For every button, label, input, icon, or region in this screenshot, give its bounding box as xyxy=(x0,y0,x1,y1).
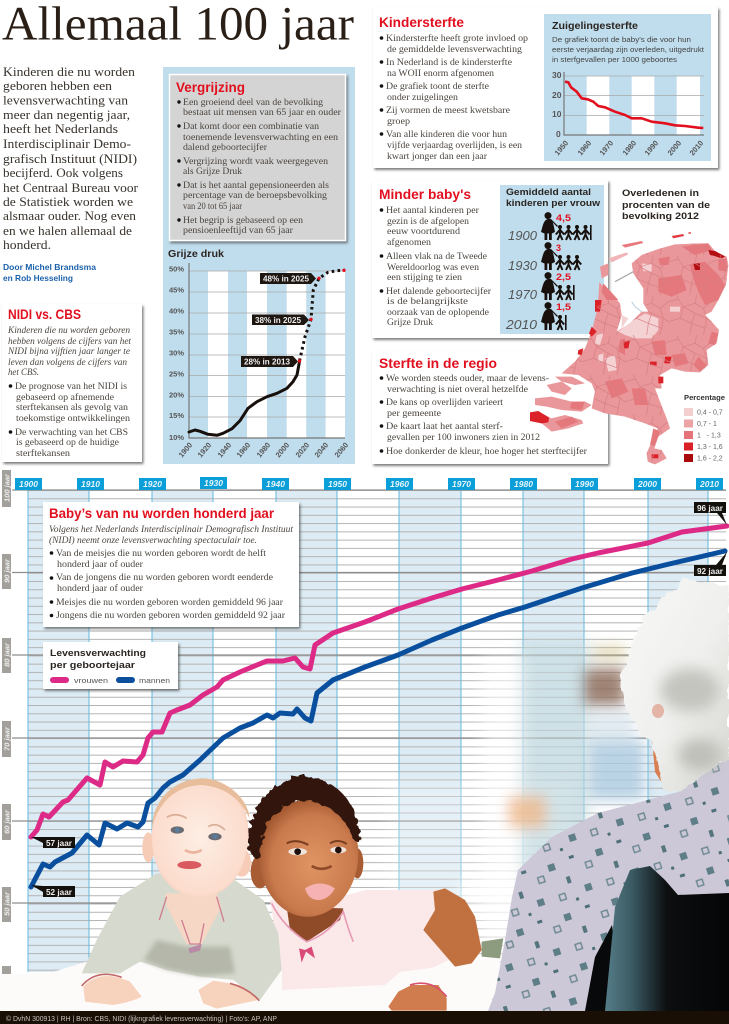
chart: Grijze druk: 30% xyxy=(169,348,184,358)
chart: Grijze druk: 35% xyxy=(169,328,184,336)
chart: Zuigelingesterfte: 1990 xyxy=(643,139,660,157)
bullets: babies: Van de meisjes die nu worden geboren wordt de helft xyxy=(56,548,266,558)
bullets: Vergrijzing: toenemende levensverwachting en een xyxy=(183,132,338,142)
year labels: 1990 xyxy=(575,479,594,489)
text: chart description: eerste verjaardag zijn overleden, uitgedrukt xyxy=(552,45,705,54)
chart: Grijze druk: 50% xyxy=(169,264,184,274)
age labels: 50 jaar xyxy=(2,891,12,916)
bullets: Kindersterfte: De grafiek toont de sterfte xyxy=(386,81,489,91)
chart: Zuigelingesterfte: 2010 xyxy=(688,139,705,157)
legend: Percentage: 1,3 - 1,6 xyxy=(697,444,723,451)
year labels: 1930 xyxy=(204,478,223,488)
bullets: NIDI: toekomstige ontwikkelingen xyxy=(16,413,130,423)
bullets: babies: honderd jaar of ouder xyxy=(57,559,143,569)
panel: Kindersterfte xyxy=(373,7,718,168)
chart: Zuigelingesterfte: 30 xyxy=(552,70,562,80)
bullets: Minder baby's: is de belangrijkste xyxy=(387,296,468,306)
callout: 57 jaar: 57 jaar xyxy=(46,839,72,848)
intro text: Kinderen die nu worden xyxy=(3,64,136,79)
byline: en Rob Hesseling xyxy=(3,273,73,283)
bullets: Kindersterfte: onder zuigelingen xyxy=(387,92,458,102)
blue line: mannen xyxy=(31,551,725,887)
intro text: becijferd. Ook volgens xyxy=(3,165,123,180)
bullets: babies: Van de jongens die nu worden geboren wordt eenderde xyxy=(56,572,273,582)
legend: Percentage: 0,4 - 0,7 xyxy=(697,410,723,416)
intro text: meer dan negentig jaar, xyxy=(3,107,130,122)
panel: Vergrijzing and Grijze druk xyxy=(163,67,355,464)
year labels: 1940 xyxy=(266,479,285,489)
bullets: Sterfte in de regio: verwachting is niet overal hetzelfde xyxy=(387,384,528,394)
pictogram row: 2010, 1,5 children: 1,5 xyxy=(556,302,571,312)
decade columns xyxy=(28,490,708,972)
legend: Levensverwachting: per geboortejaar xyxy=(50,660,135,671)
intro text: grafisch Instituut (NIDI) xyxy=(3,151,137,166)
heading: Kindersterfte: Kindersterfte xyxy=(379,14,464,30)
bullets: Kindersterfte: kwart jonger dan een jaar xyxy=(387,151,487,161)
panel: NIDI vs. CBS xyxy=(2,304,142,462)
bullets: Vergrijzing: bestaat uit mensen van 65 jaar en ouder xyxy=(183,107,341,117)
chart: Zuigelingesterfte: 0 xyxy=(556,129,561,139)
chart: Grijze druk: 40% xyxy=(169,306,184,316)
chart: Grijze druk: 1960 xyxy=(235,441,252,459)
wheelchair xyxy=(585,866,729,1011)
callout: 52 jaar: 52 jaar xyxy=(46,888,72,897)
line: grijze druk history xyxy=(189,362,300,435)
chart: Zuigelingesterfte: 1950 xyxy=(553,139,570,157)
callout: 48% in 2025: 48% in 2025 xyxy=(263,274,310,284)
bullets: Vergrijzing: pensioenleeftijd van 65 jaar xyxy=(183,225,293,235)
intro text: alsmaar ouder. Nog even xyxy=(3,208,137,223)
legend: Levensverwachting xyxy=(43,642,178,689)
photo: blanket xyxy=(0,955,500,1012)
callout: 92 jaar: 92 jaar xyxy=(697,567,723,576)
text: panel intro: (NIDI) neemt onze levensverwachting spectaculair toe. xyxy=(49,535,257,545)
chart: Zuigelingesterfte: 1980 xyxy=(621,139,638,157)
bullets: Sterfte in de regio: We worden steeds ouder, maar de levens- xyxy=(386,373,549,383)
yearly grid xyxy=(28,490,726,972)
bullets: Minder baby's: gezin is de afgelopen xyxy=(387,216,469,226)
pictogram row: 2010, 1,5 children: 2010 xyxy=(505,317,538,332)
bullets: Sterfte in de regio: gevallen per 100 inwoners zien in 2012 xyxy=(387,432,540,442)
callout: 28% in 2013: 28% in 2013 xyxy=(244,358,291,366)
legend: Levensverwachting: vrouwen xyxy=(74,676,108,685)
bullets: Sterfte in de regio: Hoe donkerder de kleur, hoe hoger het sterftecijfer xyxy=(386,446,587,456)
bullets: NIDI: sterftekansen xyxy=(16,448,70,458)
intro text: levensverwachting van xyxy=(3,92,129,108)
text: NIDI intro xyxy=(7,325,131,377)
bullets: Vergrijzing: van 20 tot 65 jaar xyxy=(183,201,242,211)
callout: 57 jaar xyxy=(31,837,75,848)
pictogram row: 1900, 4,5 children: 4,5 xyxy=(556,213,571,223)
year labels: 1980 xyxy=(514,479,533,489)
chart: Grijze druk: 1980 xyxy=(255,441,272,459)
footer xyxy=(0,1011,729,1024)
bullets: babies: Jongens die nu worden geboren worden gemiddeld 92 jaar xyxy=(56,610,285,620)
chart: Zuigelingesterfte: 1970 xyxy=(598,139,615,157)
bullets: Sterfte in de regio xyxy=(380,373,587,456)
heading: kinderen per vrouw: Gemiddeld aantal xyxy=(506,187,591,198)
bullets: Vergrijzing: als Grijze Druk xyxy=(183,166,242,176)
pictogram row: 1970, 2,5 children: 1970 xyxy=(508,287,538,302)
age labels: 90 jaar xyxy=(2,558,12,583)
year labels: 1900 xyxy=(19,479,38,489)
callout: 38% in 2025 xyxy=(252,314,309,325)
heading: kinderen per vrouw xyxy=(506,187,601,209)
chart: Grijze druk: 1920 xyxy=(196,441,213,459)
bullets: Vergrijzing: Dat komt door een combinatie van xyxy=(183,121,319,131)
callout: 96 jaar: 96 jaar xyxy=(697,504,723,513)
pictogram row: 1900, 4,5 children: 1900 xyxy=(508,228,538,243)
hair xyxy=(622,580,729,792)
bullets: Sterfte in de regio: De kans op overlijden varieert xyxy=(386,397,503,407)
pictogram row: 1970, 2,5 children: 2,5 xyxy=(556,272,571,282)
year labels: 2010 xyxy=(699,479,719,489)
legend: Percentage: 1,6 - 2,2 xyxy=(697,456,723,462)
legend: Percentage: 0,7 - 1 xyxy=(697,421,717,428)
bullets: Kindersterfte: de gemiddelde levensverwachting xyxy=(387,44,522,54)
bullets: babies xyxy=(50,548,285,620)
pictogram row: 2010, 1,5 children xyxy=(505,302,571,332)
intro text: honderd. xyxy=(3,237,51,252)
map: Netherlands mortality xyxy=(530,232,728,464)
chart: Grijze druk: 1900 xyxy=(177,441,194,459)
panel: Zuigelingesterfte xyxy=(544,14,711,161)
chart: Zuigelingesterfte: 2000 xyxy=(666,139,683,157)
intro text: het Centraal Bureau voor xyxy=(3,180,139,195)
bullets: Minder baby's: Grijze Druk xyxy=(387,317,433,327)
callout: 96 jaar xyxy=(694,502,727,525)
callout: 52 jaar xyxy=(31,885,75,897)
intro text: heeft het Nederlands xyxy=(3,121,118,136)
bullets: Minder baby's: Het dalende geboortecijfer xyxy=(386,286,491,296)
bullets: Vergrijzing xyxy=(177,97,341,235)
bullets: Vergrijzing: Vergrijzing wordt vaak weergegeven xyxy=(183,156,328,166)
data points xyxy=(298,269,346,363)
bullets: NIDI: sterftekansen als gevolg van xyxy=(16,402,128,412)
panel: Minder baby's xyxy=(372,180,608,338)
year labels: 1960 xyxy=(390,479,409,489)
bullets: Minder baby's: Het aantal kinderen per xyxy=(386,205,479,215)
bullets: NIDI: De prognose van het NIDI is xyxy=(15,381,127,391)
year labels: 1920 xyxy=(143,479,162,489)
pictogram row: 1970, 2,5 children xyxy=(508,272,575,302)
panel: Vergrijzing box xyxy=(170,74,346,240)
bullets: Kindersterfte: vijfde verjaardag overlijden, is een xyxy=(387,140,522,150)
chart: life expectancy xyxy=(2,470,726,974)
heading: NIDI vs. CBS: NIDI vs. CBS xyxy=(8,306,81,322)
bullets: Kindersterfte xyxy=(380,33,528,161)
bullets: Vergrijzing: Dat is het aantal gepensioneerden als xyxy=(183,180,329,190)
text: NIDI intro: NIDI bijna vijftien jaar langer te xyxy=(7,346,130,356)
chart: Grijze druk: 2020 xyxy=(294,441,311,459)
chart: Grijze druk: 25% xyxy=(169,370,184,378)
bullets: Vergrijzing: Het begrip is gebaseerd op een xyxy=(183,215,303,225)
line: grijze druk projection xyxy=(300,270,345,361)
age labels: 70 jaar xyxy=(2,726,12,751)
bullets: Kindersterfte: Van alle kinderen die voor hun xyxy=(386,129,507,139)
bullets: NIDI: De verwachting van het CBS xyxy=(15,427,128,437)
bullets: Minder baby's: Alleen vlak na de Tweede xyxy=(386,251,487,261)
year labels: 1970 xyxy=(452,479,471,489)
bullets: NIDI: gebaseerd op afnemende xyxy=(16,392,114,402)
bullets: Minder baby's: oorzaak van de oplopende xyxy=(387,307,489,317)
heading: Minder baby's: Minder baby's xyxy=(379,186,471,202)
year labels xyxy=(15,477,723,490)
intro text: Interdisciplinair Demo- xyxy=(3,136,131,151)
footer: © DvhN 300913 | RH | Bron: CBS, NIDI (lijkngrafiek levensverwachting) | Foto's: AP, ANP xyxy=(6,1015,277,1023)
chart: Grijze druk: 20% xyxy=(169,390,184,400)
callout: 48% in 2025 xyxy=(260,273,316,284)
text: NIDI intro: leven dan volgens de cijfers van xyxy=(8,357,127,367)
gown xyxy=(488,757,729,1011)
bullets: Vergrijzing: Een groeiend deel van de bevolking xyxy=(183,97,323,107)
chart: Zuigelingesterfte: 1960 xyxy=(576,139,593,157)
chart: Grijze druk xyxy=(169,263,350,459)
chart: Grijze druk: 15% xyxy=(169,411,184,420)
line: infant mortality xyxy=(565,82,703,128)
byline xyxy=(3,262,96,283)
text: NIDI intro: het CBS. xyxy=(8,367,39,377)
legend: Percentage: Percentage xyxy=(684,393,725,402)
pictogram row: 1900, 4,5 children xyxy=(508,212,592,243)
text: panel intro xyxy=(49,524,293,545)
chart: Grijze druk: 2040 xyxy=(313,441,330,459)
intro text: geboren hebben een xyxy=(3,78,113,93)
bullets: NIDI: is gebaseerd op de huidige xyxy=(16,437,119,447)
bullets: Minder baby's xyxy=(380,205,491,327)
intro text: en we halen allemaal de xyxy=(3,223,132,238)
heading: Overledenen in procenten: procenten van de xyxy=(622,200,710,211)
heading: Sterfte in de regio: Sterfte in de regio xyxy=(379,355,497,371)
bullets: Minder baby's: een stijging te zien xyxy=(387,272,462,282)
year labels: 1950 xyxy=(328,479,347,489)
heading: Overledenen in procenten xyxy=(622,188,710,222)
text: NIDI intro: hebben volgens de cijfers van het xyxy=(8,336,131,346)
age labels xyxy=(2,470,12,974)
chart: Grijze druk: 1940 xyxy=(216,441,233,459)
bullets: Sterfte in de regio: De kaart laat het aantal sterf- xyxy=(386,421,503,431)
callout: 38% in 2025: 38% in 2025 xyxy=(255,316,302,325)
bullets: Kindersterfte: groep xyxy=(387,116,410,126)
bullets: Kindersterfte: In Nederland is de kindersterfte xyxy=(386,57,512,67)
heading: Zuigelingesterfte: Zuigelingesterfte xyxy=(552,20,638,32)
bullets: babies: honderd jaar of ouder xyxy=(57,583,143,593)
chart: Zuigelingesterfte: 10 xyxy=(552,109,562,119)
chart: Zuigelingesterfte: 20 xyxy=(552,90,562,100)
bullets: Minder baby's: Wereldoorlog was even xyxy=(387,262,479,272)
heading: Overledenen in procenten: Overledenen in xyxy=(622,188,699,199)
text: NIDI intro: Kinderen die nu worden geboren xyxy=(7,325,130,335)
text: panel intro: Volgens het Nederlands Interdisciplinair Demografisch Instituut xyxy=(49,524,293,534)
text: chart description: De grafiek toont de baby's die voor hun xyxy=(552,35,691,44)
intro text xyxy=(3,64,139,252)
chart: Zuigelingesterfte xyxy=(552,70,705,157)
bullets: Sterfte in de regio: per gemeente xyxy=(387,408,441,418)
photo: elderly person xyxy=(488,580,729,1011)
heading: Baby's van nu worden honderd jaar: Baby’s van nu worden honderd jaar xyxy=(49,505,275,521)
bullets: Minder baby's: afgenomen xyxy=(387,237,431,247)
chart: Grijze druk: 45% xyxy=(169,286,184,294)
age labels: 60 jaar xyxy=(2,809,12,834)
chart: Grijze druk: 10% xyxy=(169,433,184,442)
panel: Gemiddeld aantal kinderen per vrouw xyxy=(500,185,604,334)
bullets: Kindersterfte: Kindersterfte heeft grote invloed op xyxy=(386,33,528,43)
bullets: Vergrijzing: percentage van de beroepsbevolking xyxy=(183,190,327,200)
chart: Grijze druk: 2000 xyxy=(274,441,291,459)
legend: Levensverwachting: mannen xyxy=(139,676,170,685)
legend: Percentage xyxy=(684,393,725,462)
intro text: de Statistiek worden we xyxy=(3,194,133,209)
pictogram row: 1930, 3 children: 3 xyxy=(556,243,561,253)
heading: Overledenen in procenten: bevolking 2012 xyxy=(622,211,699,222)
legend: Levensverwachting: Levensverwachting xyxy=(50,648,146,659)
photo: light-skinned baby xyxy=(82,778,282,1009)
heading: Grijze druk: Grijze druk xyxy=(168,248,224,260)
panel: Sterfte in de regio xyxy=(372,351,608,464)
pink line: vrouwen xyxy=(31,526,727,837)
heading: kinderen per vrouw: kinderen per vrouw xyxy=(506,198,601,209)
chart: Grijze druk: 2060 xyxy=(333,441,350,459)
bullets: Vergrijzing: dalend geboortecijfer xyxy=(183,142,267,152)
text: chart description xyxy=(552,35,705,64)
photo: dark-skinned baby xyxy=(248,777,503,1011)
age labels: 80 jaar xyxy=(2,642,12,667)
pictogram row: 1930, 3 children xyxy=(508,242,581,273)
bullets: Kindersterfte: na WOII enorm afgenomen xyxy=(387,68,494,78)
legend: Percentage: 1 - 1,3 xyxy=(697,432,721,440)
skin: neck and ear xyxy=(652,740,690,790)
callout: 28% in 2013 xyxy=(241,356,298,367)
byline: Door Michel Brandsma xyxy=(3,262,96,272)
panel: Baby's van nu worden honderd jaar xyxy=(43,502,299,627)
year labels: 2000 xyxy=(637,479,657,489)
pictogram row: 1930, 3 children: 1930 xyxy=(508,258,538,273)
background photo: blurred room xyxy=(385,640,645,955)
year labels: 1910 xyxy=(81,479,100,489)
bullets: Kindersterfte: Zij vormen de meest kwetsbare xyxy=(386,105,510,115)
age labels: 100 jaar xyxy=(2,473,12,502)
callout: 92 jaar xyxy=(694,552,727,576)
text: chart description: in sterfgevallen per 1000 geboortes xyxy=(552,55,677,64)
bullets: Minder baby's: eeuw voortdurend xyxy=(387,226,460,236)
bullets: babies: Meisjes die nu worden geboren worden gemiddeld 96 jaar xyxy=(56,597,283,607)
heading: Vergrijzing: Vergrijzing xyxy=(176,79,245,95)
bullets: NIDI xyxy=(9,381,130,458)
